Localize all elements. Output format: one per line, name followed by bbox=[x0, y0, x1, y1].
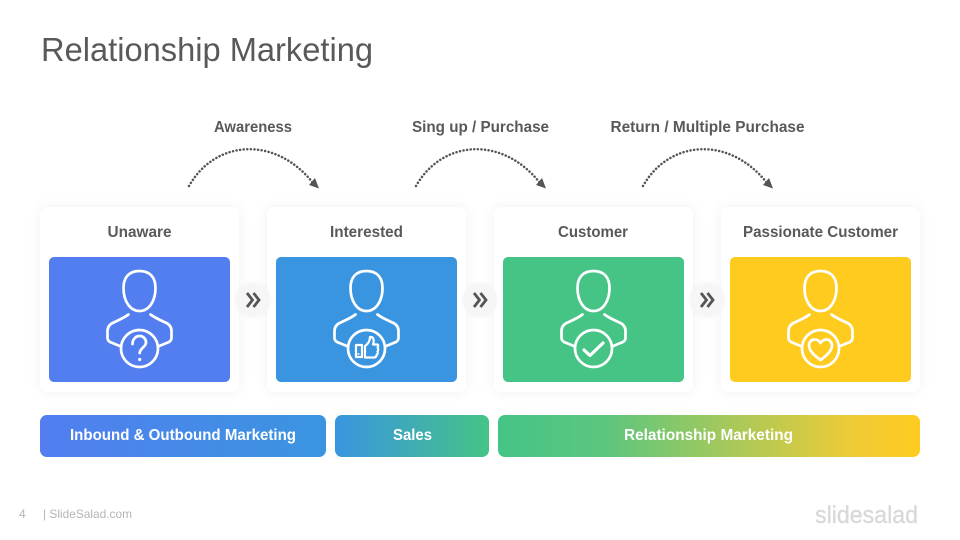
bar: Sales bbox=[335, 415, 489, 457]
icon: person with check mark bbox=[562, 271, 626, 367]
heading: Unaware: Unaware bbox=[108, 224, 172, 241]
arrow label: Return / Multiple Purchase: Return / Multiple Purchase bbox=[610, 119, 805, 136]
icon: person with question mark bbox=[108, 271, 172, 367]
icon: person with heart bbox=[788, 271, 852, 367]
logo: slidesalad: slidesalad bbox=[815, 502, 918, 529]
title: Relationship Marketing bbox=[41, 31, 373, 68]
colour block: blue bbox=[49, 257, 230, 382]
dotted arrow: Multiple Purchase bbox=[643, 149, 773, 188]
panel: Interested bbox=[267, 207, 466, 392]
panel: Unaware bbox=[40, 207, 239, 392]
chevron connector 1 bbox=[236, 283, 270, 317]
bar: Inbound & Outbound Marketing: Inbound & Outbound Marketing bbox=[70, 427, 296, 444]
bar: Sales: Sales bbox=[393, 427, 432, 444]
arrow label: Sign up / Purchase: Sing up / Purchase bbox=[412, 119, 549, 136]
heading: Customer: Customer bbox=[558, 224, 628, 241]
colour block: green bbox=[503, 257, 684, 382]
dotted arrow: Purchase bbox=[416, 149, 546, 188]
chevron connector 3 bbox=[690, 283, 724, 317]
heading: Interested: Interested bbox=[330, 224, 403, 241]
colour block: yellow bbox=[730, 257, 911, 382]
dotted arrow: Awareness bbox=[189, 149, 319, 188]
arrow label: Awareness: Awareness bbox=[214, 119, 292, 136]
page number: 4 bbox=[19, 507, 26, 521]
colour block: mid blue bbox=[276, 257, 457, 382]
icon: person with thumbs up bbox=[334, 271, 398, 367]
footer text: | SlideSalad.com bbox=[43, 507, 132, 521]
panel: Customer bbox=[494, 207, 693, 392]
bar: Relationship Marketing bbox=[498, 415, 920, 457]
heading: Passionate Customer: Passionate Customer bbox=[743, 224, 898, 241]
bar: Inbound & Outbound Marketing bbox=[40, 415, 326, 457]
bar: Relationship Marketing: Relationship Marketing bbox=[624, 427, 793, 444]
panel: Passionate Customer bbox=[721, 207, 920, 392]
chevron connector 2 bbox=[463, 283, 497, 317]
